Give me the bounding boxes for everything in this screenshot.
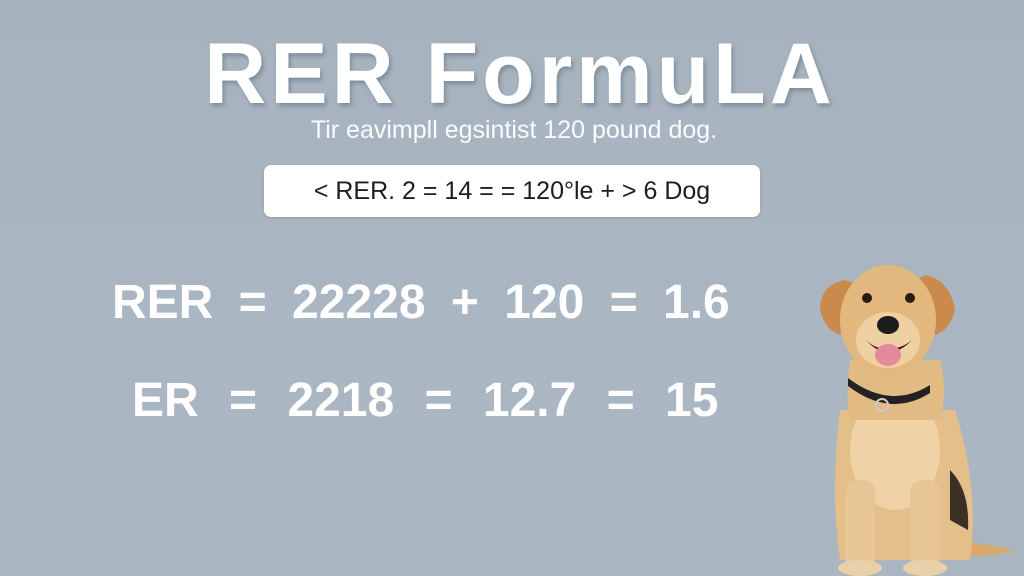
tail xyxy=(960,540,1014,556)
neck xyxy=(848,360,944,420)
eyes xyxy=(862,293,872,303)
equation 1: RER = 22228 + 120 = 1.6 xyxy=(112,276,730,329)
collar xyxy=(848,378,930,404)
formula box: < RER. 2 = 14 = = 120°le + > 6 Dog xyxy=(314,177,710,205)
mouth xyxy=(866,340,912,352)
formula box xyxy=(264,165,760,217)
equation 2: ER = 2218 = 12.7 = 15 xyxy=(132,374,718,427)
dog illustration xyxy=(820,265,1014,576)
subtitle: Tir eavimpll egsintist 120 pound dog. xyxy=(311,116,717,144)
head xyxy=(840,265,936,375)
legs xyxy=(845,480,875,570)
body xyxy=(835,410,973,560)
nose xyxy=(877,316,899,334)
title: RER FormuLA xyxy=(204,26,836,122)
ears xyxy=(820,280,860,335)
